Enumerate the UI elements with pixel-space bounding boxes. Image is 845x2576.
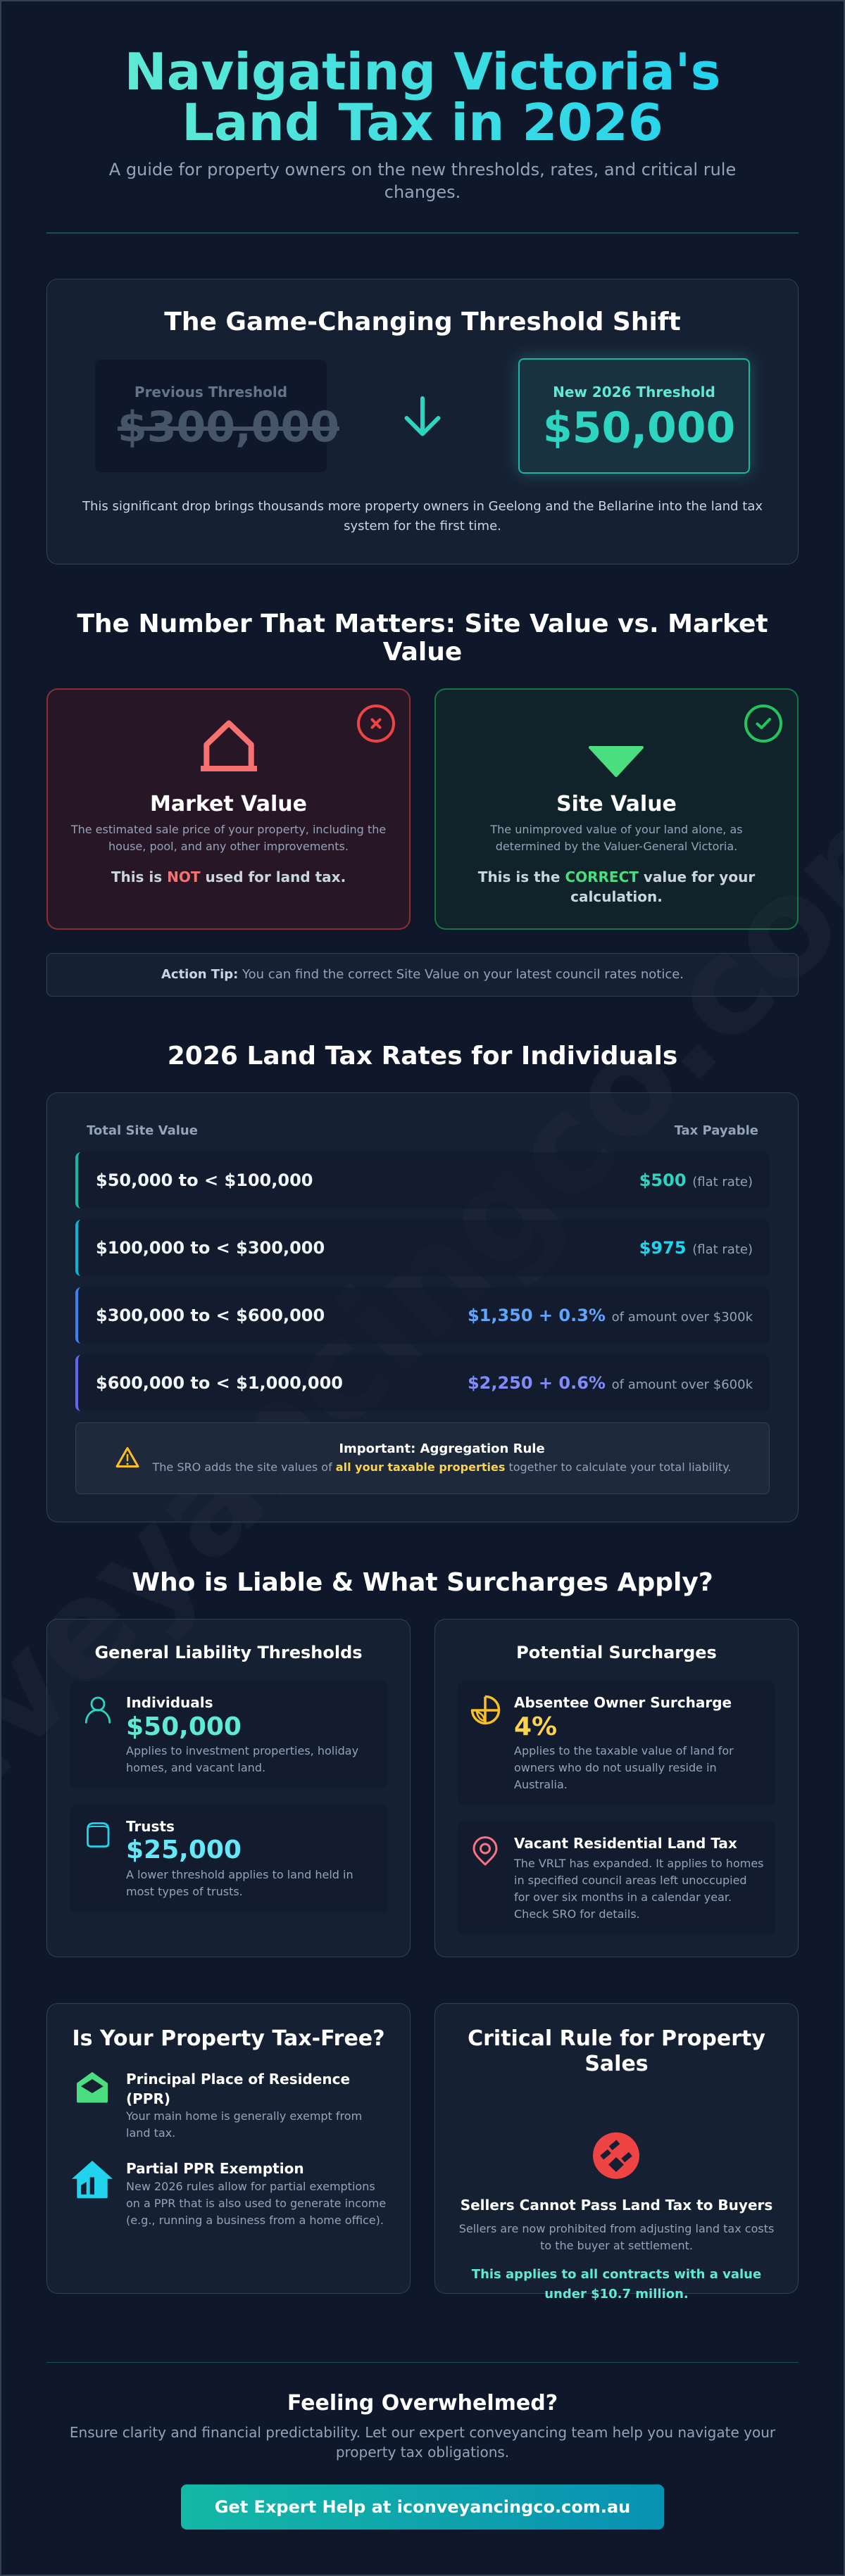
explanation text: This significant drop brings thousands more property owners in Geelong and the Bellarine into the land tax (82, 499, 763, 514)
divider (46, 232, 799, 234)
card verdict: This is NOT used for land tax. (111, 869, 346, 885)
card description (490, 823, 743, 853)
rate row 2: $975 (flat rate) (639, 1238, 753, 1258)
footer text: property tax obligations. (336, 2444, 509, 2461)
rule description: to the buyer at settlement. (540, 2239, 693, 2252)
item title (126, 2071, 350, 2107)
panel: tax rates table (46, 1092, 799, 1522)
previous threshold value: $300,000 (118, 403, 339, 452)
rule description (459, 2222, 774, 2252)
label: Trusts (126, 1818, 175, 1835)
label: Individuals (126, 1694, 213, 1711)
item text (126, 2109, 362, 2140)
panel: tax-free (46, 2003, 411, 2294)
tip text: Action Tip: You can find the correct Site Value on your latest council rates notice. (161, 967, 684, 982)
title: Land Tax in 2026 (182, 93, 663, 152)
description: A lower threshold applies to land held in (126, 1868, 353, 1881)
callout title: Important: Aggregation Rule (339, 1441, 545, 1456)
description: Applies to investment properties, holiday (126, 1744, 358, 1757)
column header: site value: Total Site Value (87, 1123, 198, 1138)
item title: Partial PPR Exemption (126, 2160, 304, 2177)
icon: location pin (473, 1836, 497, 1866)
icon: down arrow (404, 396, 441, 436)
card title: Site Value (556, 792, 677, 816)
description: in specified council areas left unoccupied (514, 1874, 747, 1887)
item: vacant land tax (458, 1821, 775, 1935)
rate row 1 (75, 1152, 770, 1208)
description (514, 1744, 734, 1791)
panel: surcharges (434, 1619, 799, 1957)
heading: liability: Who is Liable & What Surcharges Apply? (132, 1568, 713, 1597)
rate: 4% (514, 1712, 557, 1741)
description: Check SRO for details. (514, 1907, 640, 1921)
rate row 2 (75, 1220, 770, 1276)
description (126, 1744, 358, 1774)
description (126, 1868, 353, 1898)
rule description: Sellers are now prohibited from adjusting land tax costs (459, 2222, 774, 2235)
card verdict: This is the CORRECT value for your (478, 869, 755, 885)
panel heading: General Liability Thresholds (94, 1643, 363, 1662)
panel heading (468, 2026, 765, 2076)
rule note: under $10.7 million. (544, 2287, 689, 2302)
description: homes, and vacant land. (126, 1761, 265, 1774)
subtitle: changes. (384, 182, 461, 202)
item: PPR (77, 2071, 362, 2140)
description: Applies to the taxable value of land for (514, 1744, 734, 1757)
item text: (e.g., running a business from a home office). (126, 2214, 384, 2227)
card description: house, pool, and any other improvements. (108, 840, 349, 853)
label: Vacant Residential Land Tax (514, 1835, 737, 1852)
amount: $25,000 (126, 1836, 242, 1864)
callout text: The SRO adds the site values of all your taxable properties together to calculate your total liability. (152, 1460, 731, 1474)
call to action button (181, 2485, 664, 2530)
new threshold label: New 2026 Threshold (553, 384, 715, 400)
rate row 1: $50,000 to < $100,000 (96, 1170, 313, 1190)
column header: tax payable: Tax Payable (675, 1123, 758, 1138)
item text: on a PPR that is also used to generate income (126, 2197, 386, 2210)
panel heading: Sales (584, 2052, 649, 2076)
item title: Principal Place of Residence (126, 2071, 350, 2088)
description: The VRLT has expanded. It applies to homes (514, 1857, 763, 1870)
panel heading: Critical Rule for Property (468, 2026, 765, 2051)
rate row 4 (75, 1355, 770, 1411)
subtitle: A guide for property owners on the new thresholds, rates, and critical rule (109, 160, 736, 179)
rule note: This applies to all contracts with a value (472, 2267, 761, 2282)
rule note (472, 2267, 761, 2302)
action tip (46, 953, 799, 997)
panel heading: Is Your Property Tax-Free? (72, 2026, 385, 2051)
icon: no-adjustment badge (593, 2133, 639, 2179)
icon: trust container (87, 1822, 110, 1848)
description: for over six months in a calendar year. (514, 1890, 732, 1904)
icon: PPR house (77, 2072, 108, 2103)
icon: land triangle (589, 746, 644, 777)
panel: critical rule (434, 2003, 799, 2294)
rate row 1: $500 (flat rate) (639, 1170, 753, 1190)
panel: general liability (46, 1619, 411, 1957)
item text: land tax. (126, 2126, 175, 2140)
card description (70, 823, 386, 853)
icon: check badge (744, 705, 782, 743)
footer text (70, 2424, 776, 2461)
panel: site value (434, 688, 799, 930)
card verdict: calculation. (570, 888, 663, 905)
previous threshold card (95, 360, 327, 472)
item: individuals (70, 1681, 388, 1788)
icon: warning (115, 1447, 139, 1467)
new threshold value: $50,000 (543, 403, 735, 453)
item: absentee owner (458, 1681, 775, 1805)
panel: threshold shift (46, 279, 799, 564)
icon: house outline (201, 721, 257, 771)
rate row 3 (75, 1287, 770, 1344)
heading: rates: 2026 Land Tax Rates for Individuals (168, 1042, 677, 1071)
heading: site vs market value: The Number That Matters: Site Value vs. Market (77, 610, 768, 638)
item text: Your main home is generally exempt from (126, 2109, 362, 2123)
card title: Market Value (150, 792, 307, 816)
item text (126, 2180, 386, 2227)
footer heading: Feeling Overwhelmed? (287, 2391, 558, 2416)
rate row 3: $300,000 to < $600,000 (96, 1306, 325, 1325)
explanation text (82, 499, 763, 533)
amount: $50,000 (126, 1712, 242, 1741)
card description: determined by the Valuer-General Victoria. (496, 840, 737, 853)
icon: person (84, 1696, 111, 1724)
heading: site vs market value: Value (383, 638, 462, 667)
previous threshold label: Previous Threshold (134, 384, 287, 400)
icon: cross badge (357, 705, 395, 743)
label: Absentee Owner Surcharge (514, 1694, 732, 1711)
rate row 4: $2,250 + 0.6% of amount over $600k (468, 1373, 753, 1393)
subtitle (109, 160, 736, 202)
description: Australia. (514, 1778, 568, 1791)
card description: The unimproved value of your land alone, as (490, 823, 743, 836)
aggregation rule callout (75, 1422, 770, 1494)
rate row 4: $600,000 to < $1,000,000 (96, 1373, 343, 1393)
explanation text: system for the first time. (344, 519, 501, 533)
new threshold card (518, 358, 750, 474)
divider (46, 2362, 799, 2363)
heading: The Game-Changing Threshold Shift (164, 308, 681, 336)
panel: market value (46, 688, 411, 930)
footer text: Ensure clarity and financial predictability. Let our expert conveyancing team help you navigate your (70, 2424, 775, 2441)
description (514, 1857, 763, 1921)
rate row 2: $100,000 to < $300,000 (96, 1238, 325, 1258)
description: owners who do not usually reside in (514, 1761, 717, 1774)
card verdict (477, 869, 755, 905)
icon: partial exemption house (72, 2161, 113, 2199)
card description: The estimated sale price of your property, including the (71, 823, 386, 836)
rate row 3: $1,350 + 0.3% of amount over $300k (468, 1306, 753, 1325)
description: most types of trusts. (126, 1885, 243, 1898)
item: trusts (70, 1805, 388, 1912)
button label: Get Expert Help at iconveyancingco.com.au (215, 2497, 630, 2517)
rule title: Sellers Cannot Pass Land Tax to Buyers (461, 2197, 772, 2214)
title (121, 46, 724, 148)
heading: site vs market value (77, 610, 768, 667)
item title: (PPR) (126, 2090, 170, 2107)
title: Navigating Victoria's (125, 42, 720, 101)
panel heading: Potential Surcharges (516, 1643, 717, 1662)
icon: pie leaf (470, 1695, 500, 1724)
item: partial exemption (72, 2160, 386, 2227)
item text: New 2026 rules allow for partial exemptions (126, 2180, 375, 2193)
